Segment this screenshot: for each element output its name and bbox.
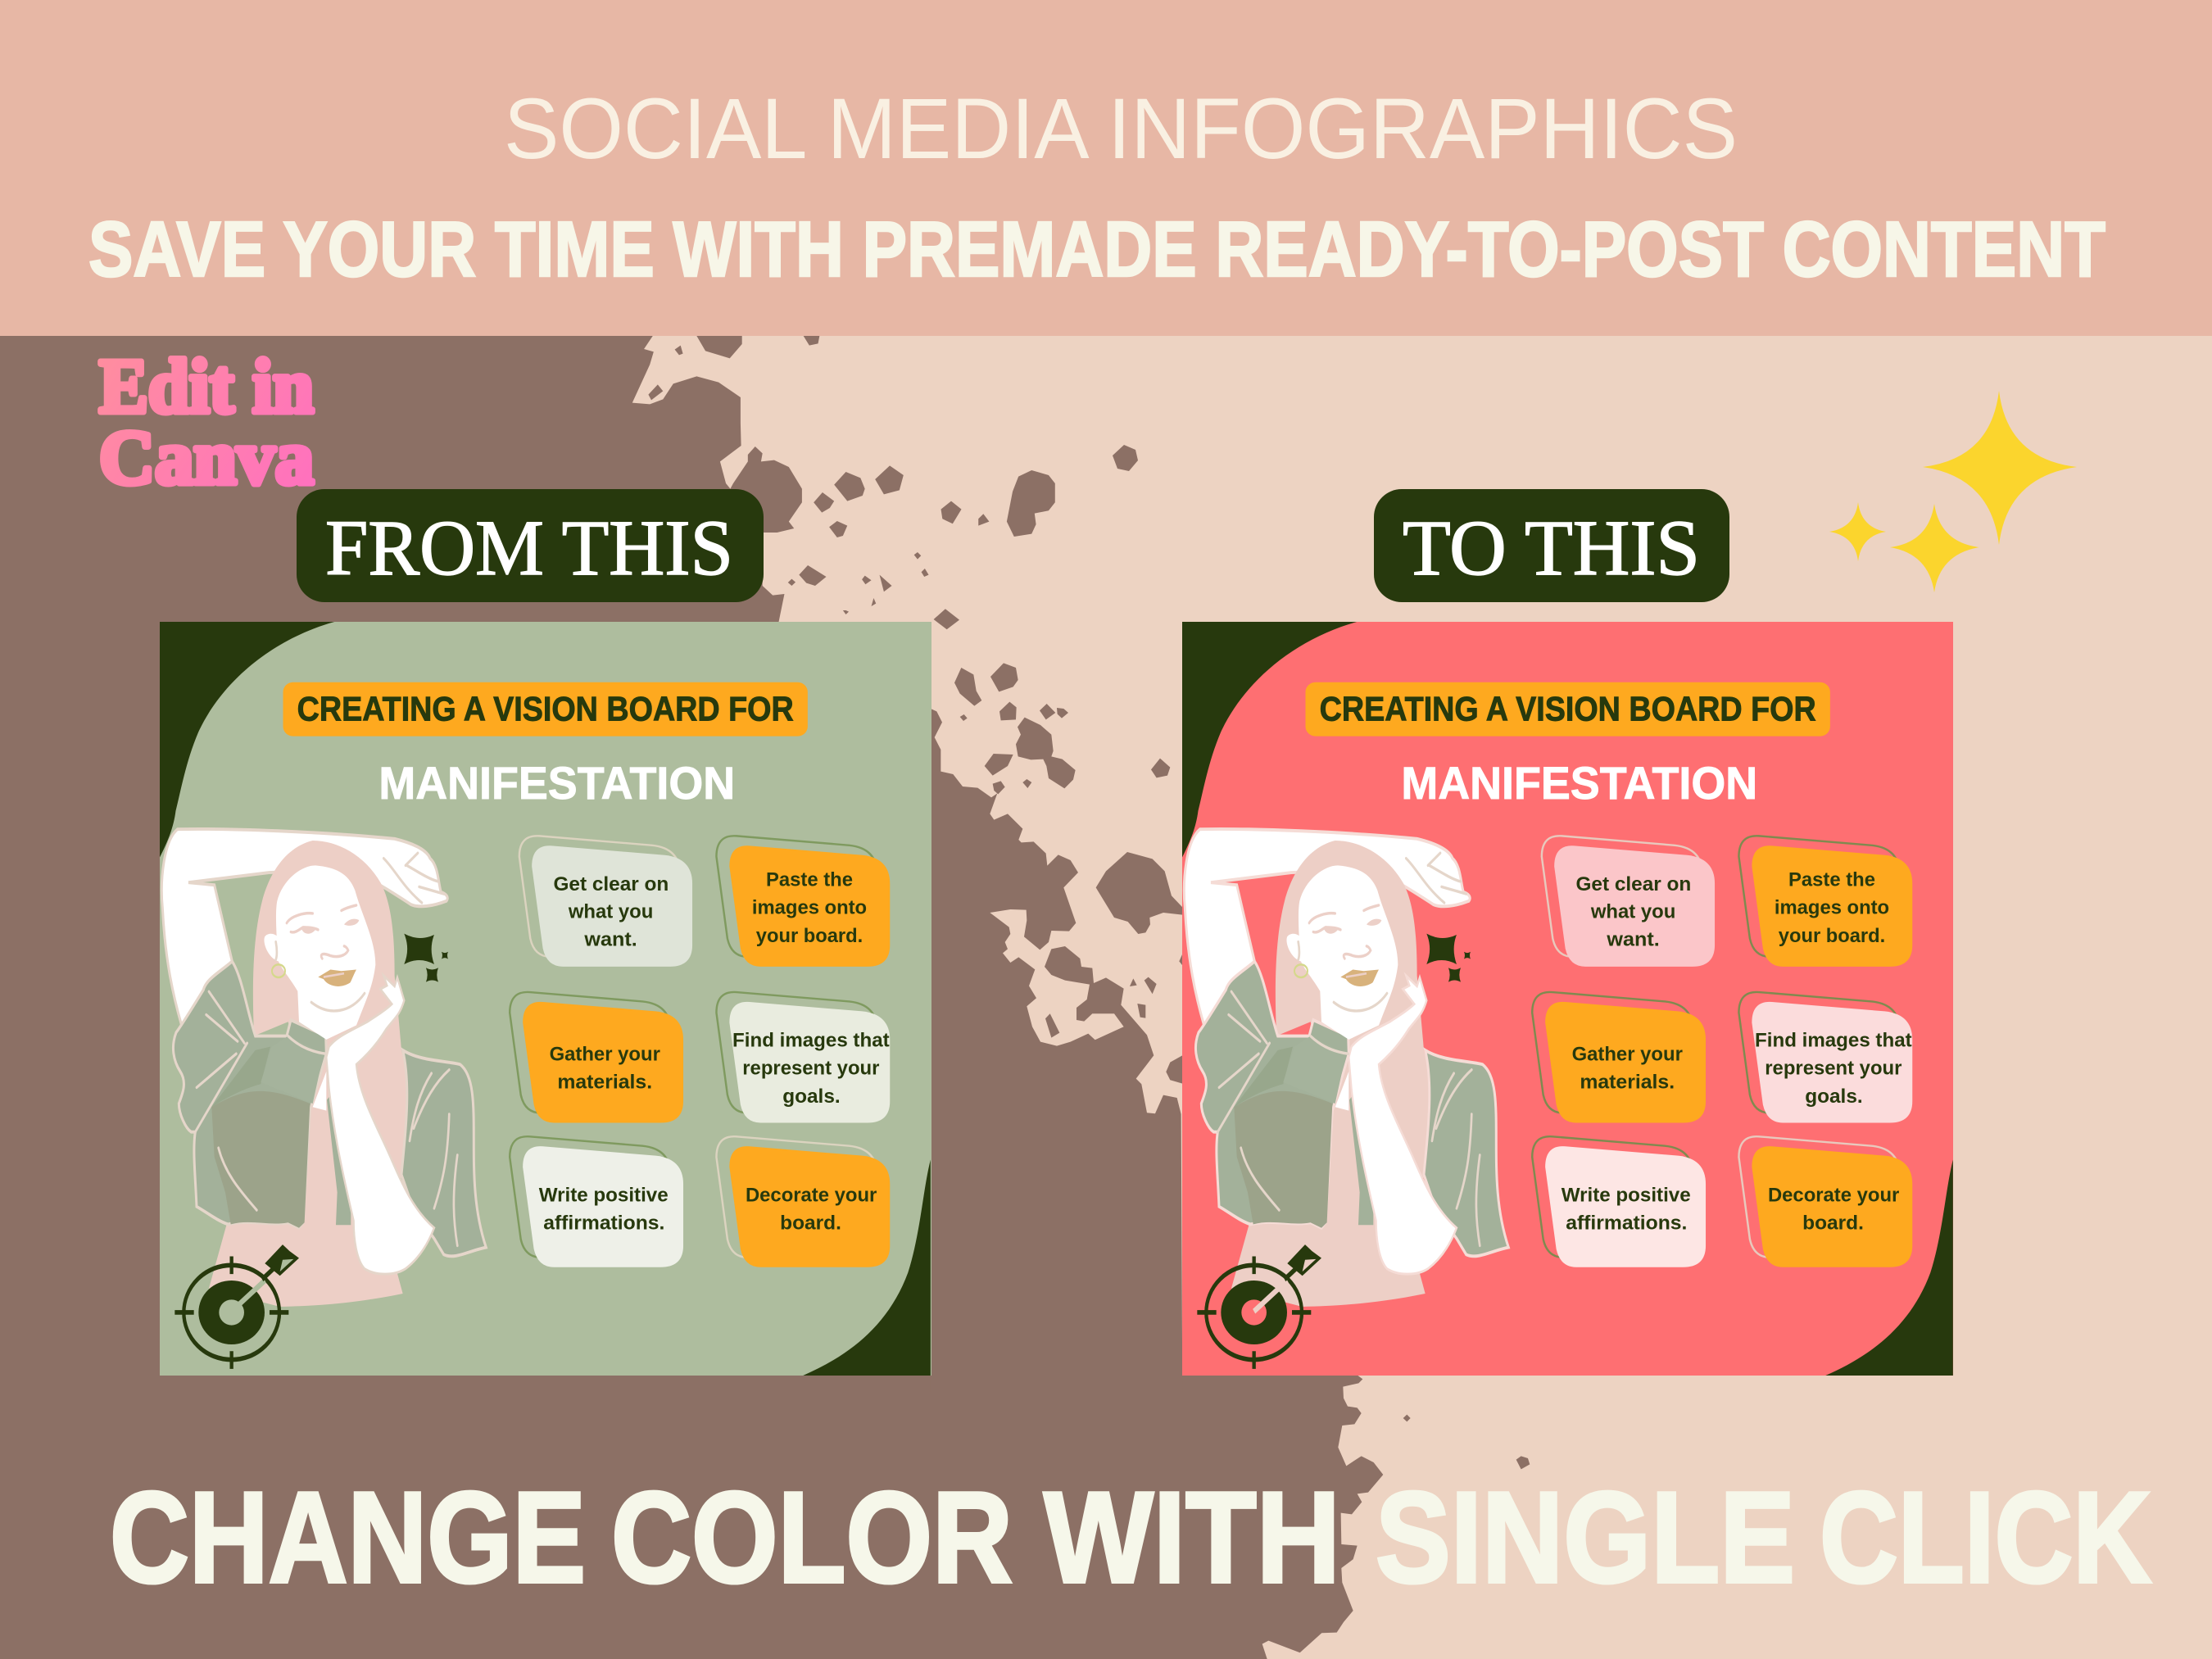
card: gather materials: Gather your	[550, 1044, 660, 1065]
card: gather materials	[510, 992, 683, 1122]
card: decorate	[1738, 1136, 1912, 1267]
card: write affirmations: Write positive	[539, 1185, 669, 1206]
heading pill	[1305, 682, 1830, 737]
edit in canva label: Edit in	[99, 344, 314, 429]
card: get clear: Get clear on	[1575, 873, 1691, 895]
badge: from this	[297, 489, 764, 602]
heading: manifestation: MANIFESTATION	[1401, 757, 1757, 809]
heading pill	[283, 682, 808, 737]
footer headline: COLOR	[611, 1466, 1013, 1610]
card: gather materials: Gather your	[1572, 1044, 1683, 1065]
edit in canva label: Canva	[99, 415, 314, 501]
card: find images: goals.	[1805, 1086, 1863, 1108]
icon: target with arrow	[175, 1244, 299, 1369]
card: write affirmations	[510, 1136, 683, 1267]
card: paste the images: Paste the	[1788, 869, 1875, 891]
card: gather materials: materials.	[1580, 1072, 1675, 1093]
brown splatter background	[0, 328, 1530, 1659]
card: find images: Find images that	[732, 1030, 890, 1051]
footer headline	[110, 1466, 2151, 1610]
title: social media infographics: SOCIAL MEDIA INFOGRAPHICS	[504, 81, 1738, 177]
card: paste the images: Paste the	[766, 869, 853, 891]
card: get clear	[519, 836, 692, 967]
card: get clear	[1542, 836, 1715, 967]
card: get clear: want.	[1606, 929, 1660, 951]
card: paste the images	[716, 836, 890, 967]
heading pill: CREATING A VISION BOARD FOR	[297, 690, 794, 728]
edit in canva label	[99, 344, 314, 501]
icon: yellow sparkles	[1829, 391, 2077, 592]
card: paste the images	[1738, 836, 1912, 967]
card: get clear: what you	[1590, 901, 1675, 922]
illustration: woman	[161, 829, 486, 1307]
footer headline: CHANGE	[110, 1466, 586, 1610]
card: paste the images: your board.	[1779, 925, 1885, 947]
footer headline: SINGLE	[1376, 1466, 1795, 1610]
card: gather materials: materials.	[557, 1072, 652, 1093]
panel: to this (coral)	[1182, 621, 1953, 1376]
badge: from this: FROM THIS	[325, 504, 733, 592]
panel decoration and headings	[160, 621, 931, 1376]
footer headline: CLICK	[1820, 1466, 2151, 1610]
heading: manifestation: MANIFESTATION	[378, 757, 735, 809]
card: find images: Find images that	[1755, 1030, 1912, 1051]
icon: sparkles dark	[404, 934, 448, 982]
card: gather materials	[1532, 992, 1706, 1122]
card: find images	[716, 992, 890, 1122]
badge: to this	[1374, 489, 1729, 602]
card: decorate: board.	[780, 1213, 841, 1235]
illustration: woman	[1184, 829, 1508, 1307]
card: get clear: want.	[583, 929, 637, 951]
card: write affirmations	[1532, 1136, 1706, 1267]
icon: sparkles dark	[1426, 934, 1471, 982]
card: paste the images: images onto	[752, 897, 867, 919]
card: decorate: Decorate your	[746, 1185, 877, 1206]
heading pill: CREATING A VISION BOARD FOR	[1320, 690, 1816, 728]
card: paste the images: your board.	[756, 925, 863, 947]
card: decorate	[716, 1136, 890, 1267]
header band	[0, 0, 2212, 336]
card: write affirmations: affirmations.	[1566, 1213, 1687, 1235]
card: get clear: what you	[568, 901, 653, 922]
card: decorate: board.	[1802, 1213, 1864, 1235]
card: find images: represent your	[1765, 1058, 1902, 1080]
icon: target with arrow	[1197, 1244, 1321, 1369]
card: paste the images: images onto	[1775, 897, 1889, 919]
panel: from this (green)	[160, 621, 931, 1376]
card: find images	[1738, 992, 1912, 1122]
panel decoration and headings	[1182, 621, 1953, 1376]
card: write affirmations: Write positive	[1562, 1185, 1691, 1206]
badge: to this: TO THIS	[1403, 504, 1700, 592]
card: find images: goals.	[782, 1086, 841, 1108]
card: get clear: Get clear on	[553, 873, 669, 895]
card: decorate: Decorate your	[1768, 1185, 1900, 1206]
card: write affirmations: affirmations.	[543, 1213, 664, 1235]
footer headline: WITH	[1044, 1466, 1340, 1610]
card: find images: represent your	[742, 1058, 880, 1080]
